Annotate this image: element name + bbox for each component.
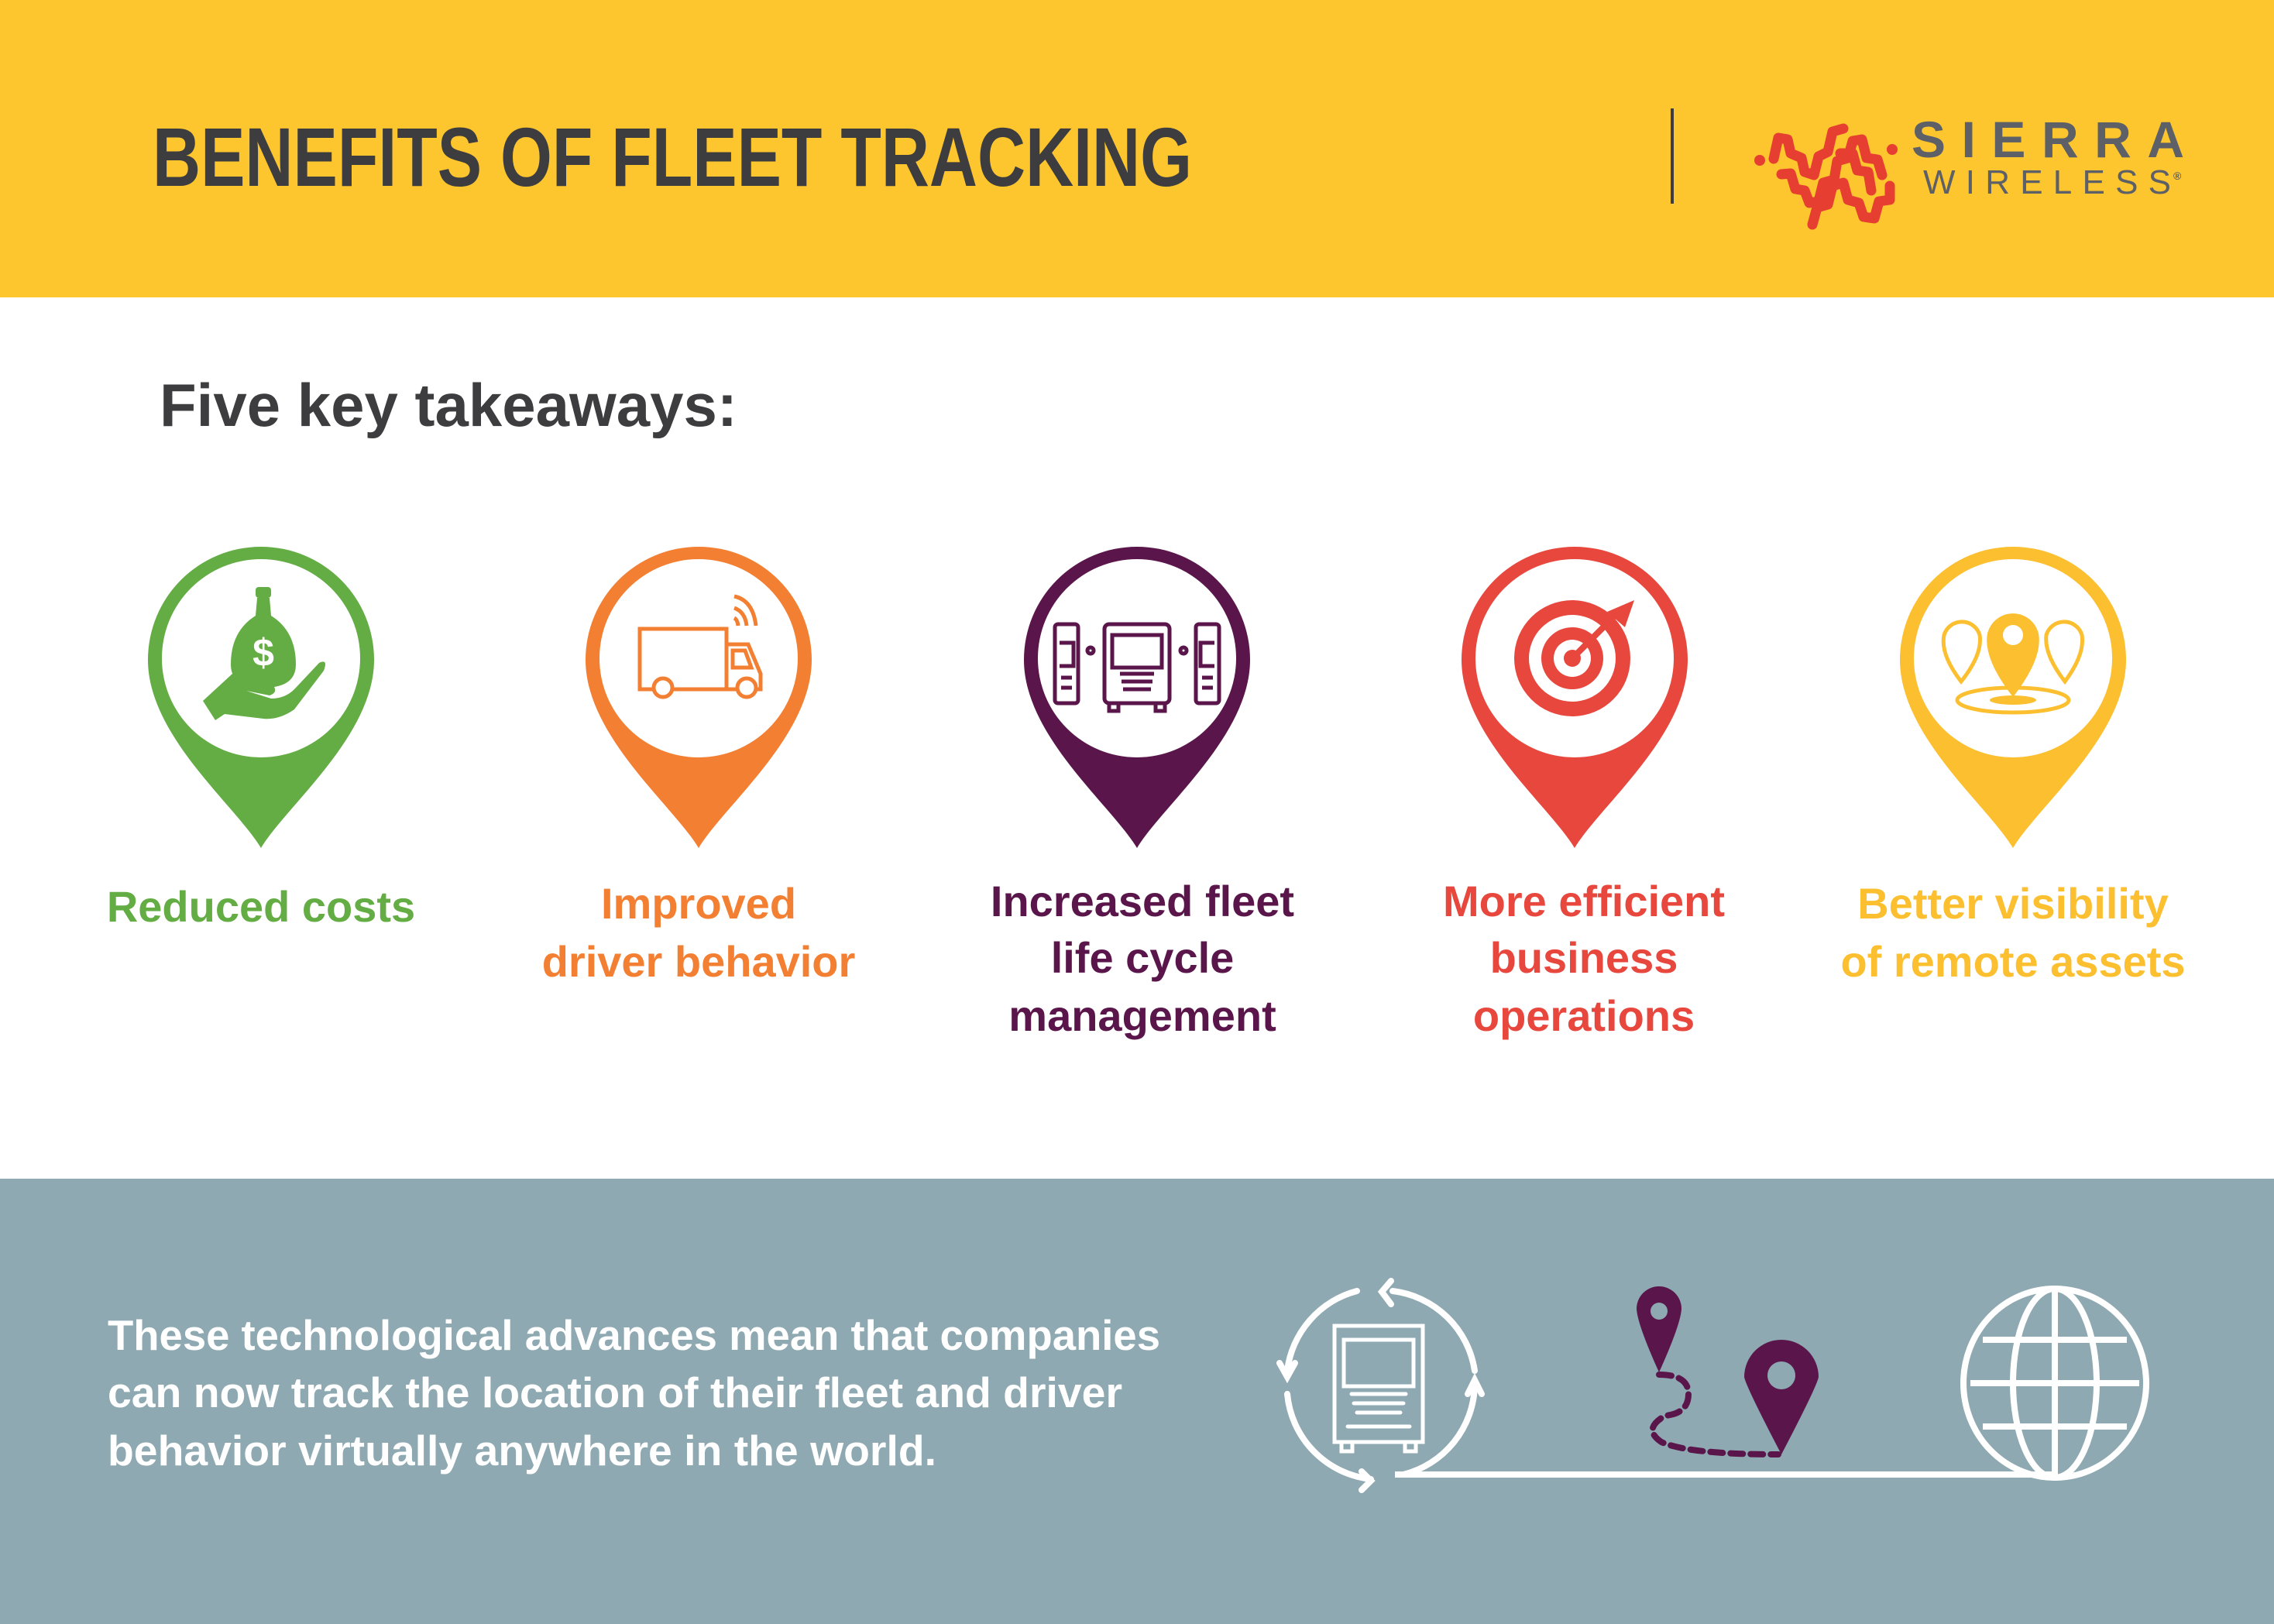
pin 2: improved driver behavior	[586, 547, 812, 848]
bottom text	[108, 1311, 1160, 1475]
icon: target	[1514, 600, 1634, 716]
bottom text: can now track the location of their fleet and driver	[108, 1368, 1122, 1416]
icon: globe	[1963, 1289, 2146, 1478]
label: efficient operations: business	[1490, 933, 1678, 982]
label: fleet life cycle management: management	[1008, 991, 1276, 1040]
label: fleet life cycle management: Increased fleet	[991, 877, 1294, 925]
logo: Sierra Wireless: WIRELESS	[1923, 163, 2171, 201]
icon: truck with signal	[640, 596, 761, 697]
label: efficient operations	[1443, 877, 1725, 1040]
icon: truck cycle	[1280, 1281, 1482, 1490]
subheading: Five key takeaways:	[160, 371, 737, 439]
pin 3: fleet life cycle	[1024, 547, 1250, 848]
icon: route pins	[1637, 1286, 1819, 1454]
title: BENEFITS OF FLEET TRACKING	[153, 110, 1192, 204]
label: visibility	[1840, 879, 2186, 986]
connector line	[1395, 1471, 2055, 1478]
pin 5: visibility	[1900, 547, 2126, 848]
pin 4: efficient operations	[1462, 547, 1688, 848]
logo: Sierra Wireless: ®	[2173, 170, 2182, 182]
bottom text: behavior virtually anywhere in the world.	[108, 1427, 936, 1475]
header band	[0, 0, 2274, 297]
pin 1: reduced costs	[148, 547, 374, 848]
bottom text: These technological advances mean that companies	[108, 1311, 1160, 1359]
label: improved driver behavior	[542, 879, 855, 986]
bottom band	[0, 1179, 2274, 1624]
label: fleet life cycle management: life cycle	[1051, 933, 1234, 982]
logo text: SIERRA	[1912, 111, 2184, 168]
icon: money bag in hand: $	[252, 631, 274, 675]
label: visibility: of remote assets	[1840, 937, 2186, 986]
label: improved driver behavior: Improved	[601, 879, 796, 928]
label: efficient operations: More efficient	[1443, 877, 1725, 925]
label: reduced costs: Reduced costs	[107, 882, 415, 931]
logo: Sierra Wireless	[1754, 111, 2184, 225]
label: improved driver behavior: driver behavior	[542, 937, 855, 986]
icon: location pins	[1943, 613, 2083, 712]
icon: money bag in hand	[203, 587, 325, 720]
label: visibility: Better visibility	[1857, 879, 2169, 928]
label: efficient operations: operations	[1473, 991, 1695, 1040]
label: fleet life cycle management	[991, 877, 1294, 1040]
icon: three trucks	[1055, 624, 1219, 711]
header divider	[1671, 108, 1674, 204]
logo mark	[1754, 129, 1898, 225]
